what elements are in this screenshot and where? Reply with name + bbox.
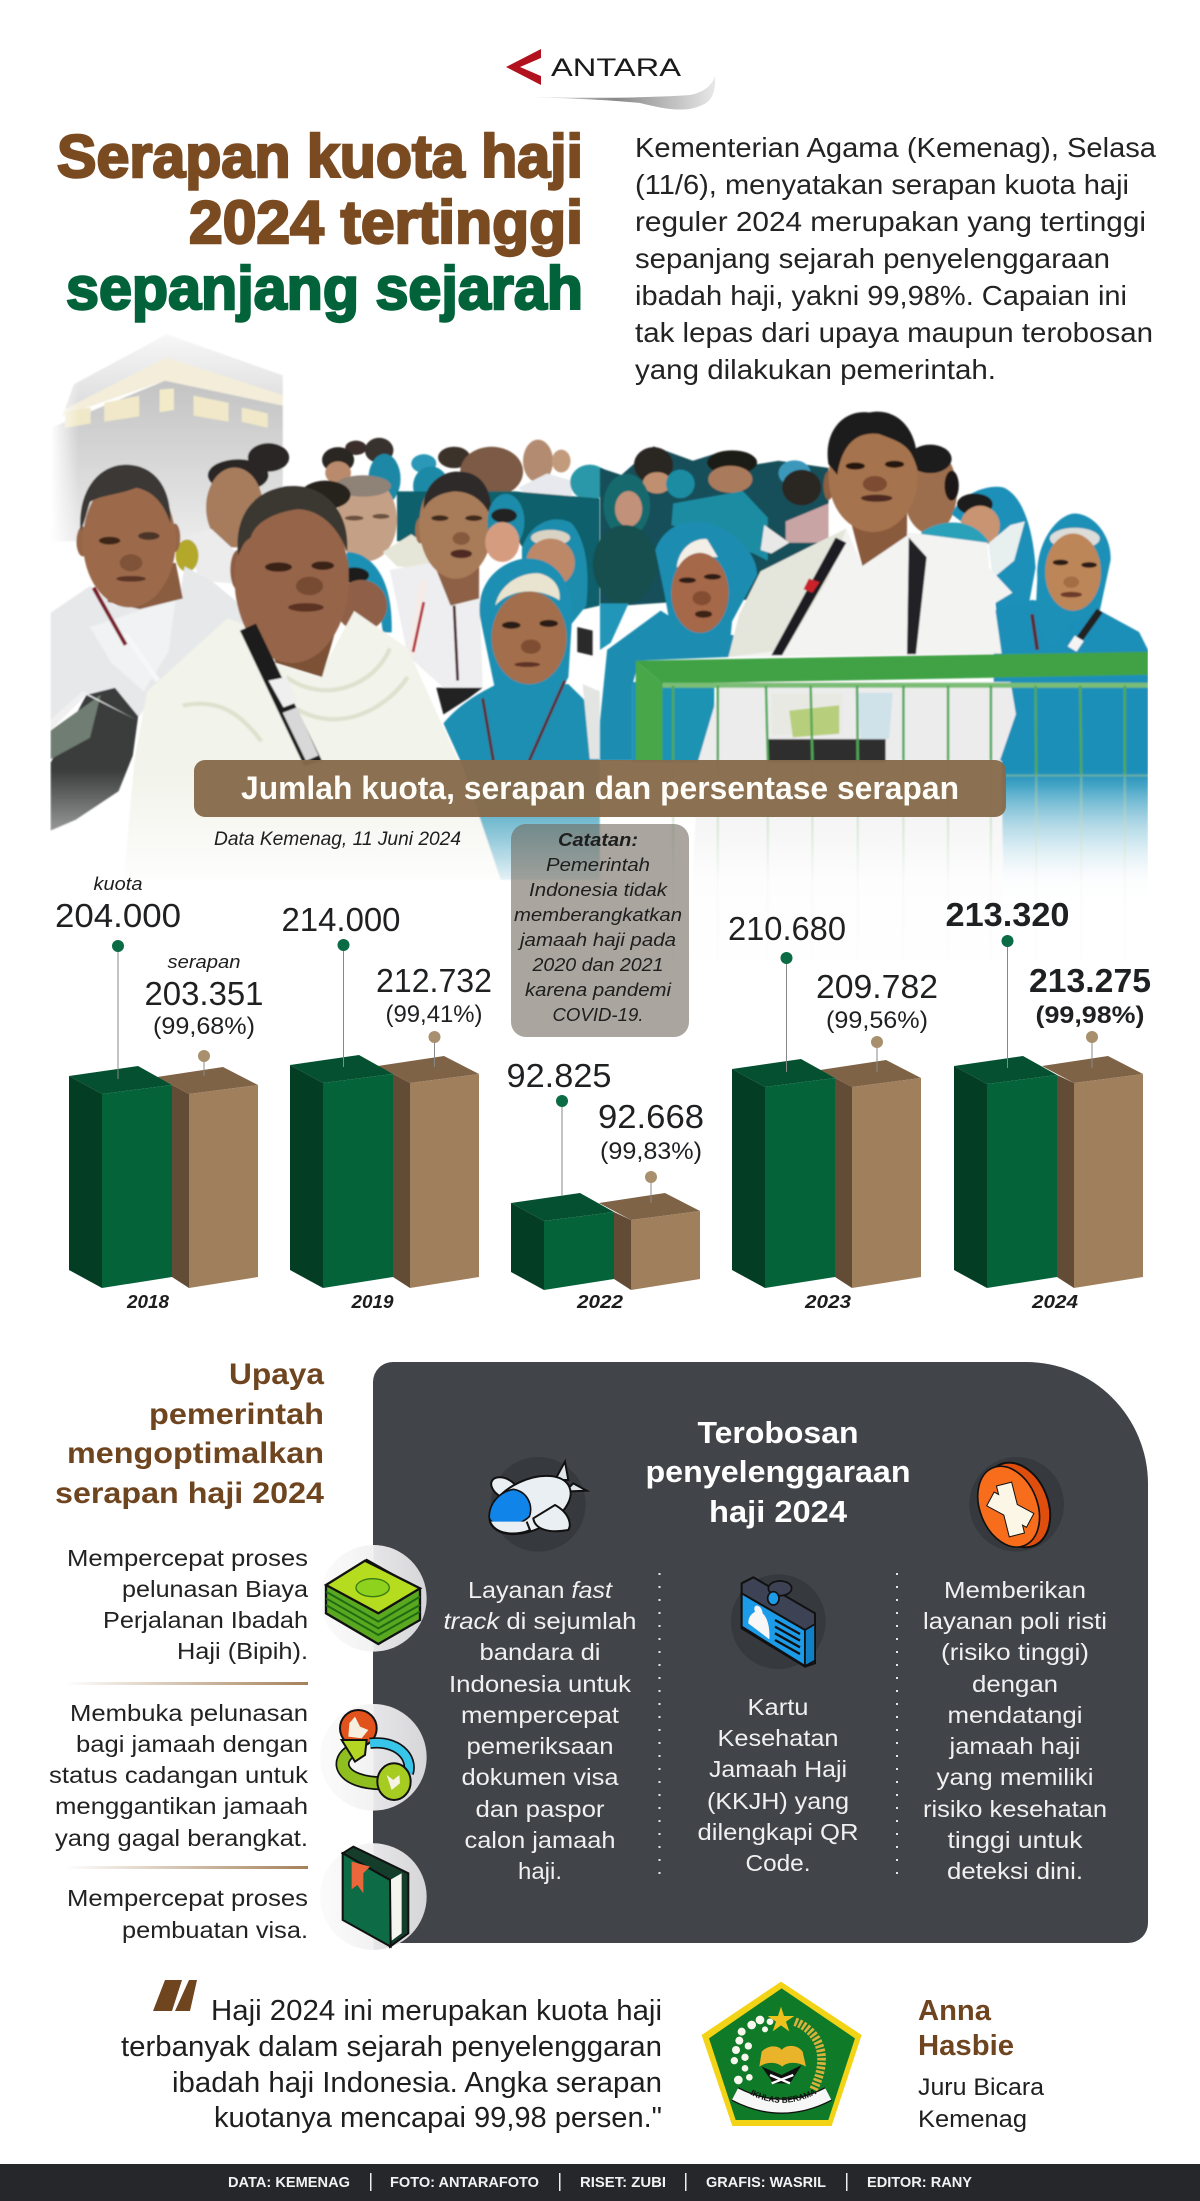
column: fast track: track di sejumlah xyxy=(444,1608,636,1634)
photo left half: Kaaba and pilgrims xyxy=(51,334,609,880)
lead paragraph xyxy=(635,132,1156,385)
column: fast track: dokumen visa xyxy=(462,1764,619,1790)
photo right half: pilgrims behind the green fence xyxy=(592,410,1148,880)
list item 2: menggantikan jamaah xyxy=(55,1793,308,1819)
bars and labels 2024 xyxy=(946,896,1151,1312)
column: poli risti: layanan poli risti xyxy=(923,1608,1107,1634)
heading: terobosan: penyelenggaraan xyxy=(646,1454,910,1489)
quote text: Haji 2024 ini merupakan kuota haji xyxy=(211,1995,662,2027)
heading: upaya pemerintah: mengoptimalkan xyxy=(67,1437,324,1470)
heading banner: chart title xyxy=(194,760,1006,817)
callout: catatan: 2020 dan 2021 xyxy=(531,955,664,975)
column: poli risti xyxy=(923,1577,1107,1884)
heading: upaya pemerintah: Upaya xyxy=(229,1358,324,1391)
quote text: ibadah haji Indonesia. Angka serapan xyxy=(172,2067,662,2099)
icon: ID card xyxy=(731,1574,826,1669)
list item 3: pembuatan visa. xyxy=(122,1917,308,1943)
column: poli risti: risiko kesehatan xyxy=(923,1796,1107,1822)
logo: ANTARA xyxy=(506,49,715,110)
list item 2: yang gagal berangkat. xyxy=(55,1825,308,1851)
title: Serapan kuota haji xyxy=(57,123,583,190)
data source note: Data Kemenag, 11 Juni 2024 xyxy=(214,829,461,850)
callout: catatan: Indonesia tidak xyxy=(529,880,668,900)
bars and labels 2024: 213.320 xyxy=(946,896,1070,933)
bars and labels 2019: 212.732 xyxy=(376,962,492,999)
list item 2 xyxy=(49,1700,309,1851)
column: fast track: pemeriksaan xyxy=(466,1733,614,1759)
column: fast track: bandara di xyxy=(480,1639,600,1665)
heading: upaya pemerintah xyxy=(55,1358,324,1510)
footer credits: FOTO: ANTARAFOTO xyxy=(390,2174,539,2191)
column: poli risti: deteksi dini. xyxy=(947,1858,1083,1884)
bars and labels 2024: (99,98%) xyxy=(1036,1002,1144,1029)
speaker name: Hasbie xyxy=(918,2030,1014,2062)
icon: quotation mark xyxy=(153,1980,197,2011)
lead paragraph: Kementerian Agama (Kemenag), Selasa xyxy=(635,132,1156,163)
column: kartu kesehatan xyxy=(698,1694,858,1876)
column: fast track: mempercepat xyxy=(461,1702,620,1728)
icon: refresh with coins xyxy=(320,1704,427,1811)
title: sepanjang sejarah xyxy=(66,255,583,322)
lead paragraph: sepanjang sejarah penyelenggaraan xyxy=(635,243,1110,274)
column: fast track: Layanan fast xyxy=(468,1577,614,1603)
panel: terobosan xyxy=(373,1362,1148,1943)
list item 1: pelunasan Biaya xyxy=(122,1576,308,1602)
footer credits xyxy=(0,2164,1200,2201)
lead paragraph: tak lepas dari upaya maupun terobosan xyxy=(635,317,1153,348)
footer credits: GRAFIS: WASRIL xyxy=(706,2174,826,2191)
quote text xyxy=(121,1995,662,2134)
column: poli risti: dengan xyxy=(972,1671,1058,1697)
list item 1: Mempercepat proses xyxy=(67,1545,308,1571)
bars and labels 2018: kuota xyxy=(94,874,142,894)
title xyxy=(57,123,583,322)
lead paragraph: reguler 2024 merupakan yang tertinggi xyxy=(635,206,1146,237)
lead paragraph: (11/6), menyatakan serapan kuota haji xyxy=(635,169,1129,200)
quote text: kuotanya mencapai 99,98 persen." xyxy=(214,2102,662,2134)
icon: green book xyxy=(320,1843,427,1950)
heading: terobosan xyxy=(646,1415,910,1529)
column: poli risti: jamaah haji xyxy=(948,1733,1080,1759)
column: kartu kesehatan: Jamaah Haji xyxy=(709,1756,847,1782)
heading: upaya pemerintah: pemerintah xyxy=(149,1398,324,1431)
column: fast track xyxy=(444,1577,636,1884)
speaker name xyxy=(918,1995,1045,2133)
bars and labels 2019: 2019 xyxy=(350,1292,394,1312)
quote text: terbanyak dalam sejarah penyelenggaran xyxy=(121,2031,662,2063)
list item 3 xyxy=(67,1885,308,1943)
column: kartu kesehatan: Kartu xyxy=(748,1694,808,1720)
callout: catatan: memberangkatkan xyxy=(514,905,682,925)
heading: terobosan: Terobosan xyxy=(698,1415,858,1450)
icon: airplane xyxy=(480,1457,587,1552)
bars and labels 2018: 2018 xyxy=(126,1292,169,1312)
column: fast track: dan paspor xyxy=(476,1796,605,1822)
bars and labels 2022: 2022 xyxy=(576,1292,623,1312)
footer credits: RISET: ZUBI xyxy=(580,2174,666,2191)
list item 2: Membuka pelunasan xyxy=(70,1700,308,1726)
callout: catatan: COVID-19. xyxy=(552,1005,644,1025)
callout: catatan: Pemerintah xyxy=(546,855,650,875)
bars and labels 2019: (99,41%) xyxy=(386,1001,482,1028)
callout: catatan: karena pandemi xyxy=(525,980,672,1000)
column: poli risti: yang memiliki xyxy=(936,1764,1094,1790)
list item 3: Mempercepat proses xyxy=(67,1885,308,1911)
speaker name: Anna xyxy=(918,1995,992,2027)
column: poli risti: Memberikan xyxy=(944,1577,1086,1603)
icon: money stack xyxy=(320,1545,427,1652)
bars and labels 2023: 2023 xyxy=(804,1292,851,1312)
photo fade into white xyxy=(40,770,1160,1065)
column: poli risti: (risiko tinggi) xyxy=(941,1639,1089,1665)
callout: catatan: jamaah haji pada xyxy=(517,930,676,950)
column: fast track: Indonesia untuk xyxy=(449,1671,632,1697)
bars and labels 2023: (99,56%) xyxy=(826,1007,928,1034)
bars and labels 2018: (99,68%) xyxy=(153,1013,255,1040)
column: poli risti: mendatangi xyxy=(948,1702,1082,1728)
logo: ANTARA: ANTARA xyxy=(551,54,681,82)
bars and labels 2022 xyxy=(506,1057,704,1312)
bars and labels 2018 xyxy=(55,874,264,1312)
list item 2: bagi jamaah dengan xyxy=(76,1731,308,1757)
bars and labels 2023: 210.680 xyxy=(728,910,846,947)
title: 2024 tertinggi xyxy=(189,189,583,256)
list item 2: status cadangan untuk xyxy=(49,1762,309,1788)
icon: Kemenag emblem xyxy=(702,1982,862,2126)
column: kartu kesehatan: (KKJH) yang xyxy=(707,1788,849,1814)
list: upaya pemerintah xyxy=(49,1545,309,1943)
column: kartu kesehatan: dilengkapi QR xyxy=(698,1819,858,1845)
footer credits: EDITOR: RANY xyxy=(867,2174,972,2191)
bars and labels 2023: 209.782 xyxy=(816,968,938,1005)
lead paragraph: yang dilakukan pemerintah. xyxy=(635,354,996,385)
list item 1: Haji (Bipih). xyxy=(177,1638,308,1664)
heading: terobosan: haji 2024 xyxy=(709,1494,848,1529)
bars and labels 2019: 214.000 xyxy=(282,901,400,938)
column: fast track: haji. xyxy=(518,1858,562,1884)
bars and labels 2019 xyxy=(282,901,492,1312)
heading banner: chart title: Jumlah kuota, serapan dan persentase serapan xyxy=(241,770,959,806)
bars and labels 2018: 203.351 xyxy=(144,975,264,1012)
footer credits: DATA: KEMENAG xyxy=(228,2174,350,2191)
callout: catatan xyxy=(511,824,689,1037)
column: poli risti: tinggi untuk xyxy=(948,1827,1083,1853)
bars and labels 2022: 92.825 xyxy=(506,1057,612,1094)
lead paragraph: ibadah haji, yakni 99,98%. Capaian ini xyxy=(635,280,1127,311)
bars and labels 2024: 213.275 xyxy=(1029,962,1151,999)
column: kartu kesehatan: Kesehatan xyxy=(718,1725,838,1751)
icon: Kemenag emblem: IKHLAS BERAMAL xyxy=(750,2090,816,2103)
list item 1 xyxy=(67,1545,308,1664)
speaker name: Kemenag xyxy=(918,2106,1027,2133)
heading: upaya pemerintah: serapan haji 2024 xyxy=(55,1477,324,1510)
bars and labels 2018: serapan xyxy=(168,952,240,972)
callout: catatan: Catatan: xyxy=(558,830,638,850)
bar chart: kuota and serapan per year xyxy=(55,874,1151,1312)
column: fast track: calon jamaah xyxy=(464,1827,616,1853)
speaker name: Juru Bicara xyxy=(918,2074,1045,2101)
icon: medical cross xyxy=(966,1453,1064,1557)
bars and labels 2023 xyxy=(728,910,938,1312)
bars and labels 2022: 92.668 xyxy=(598,1098,704,1135)
column: kartu kesehatan: Code. xyxy=(746,1850,810,1876)
bars and labels 2024: 2024 xyxy=(1031,1292,1078,1312)
bars and labels 2022: (99,83%) xyxy=(600,1138,702,1165)
list item 1: Perjalanan Ibadah xyxy=(103,1607,308,1633)
bars and labels 2018: 204.000 xyxy=(55,897,181,934)
photo: pilgrims with the Kaaba behind xyxy=(51,334,1148,960)
